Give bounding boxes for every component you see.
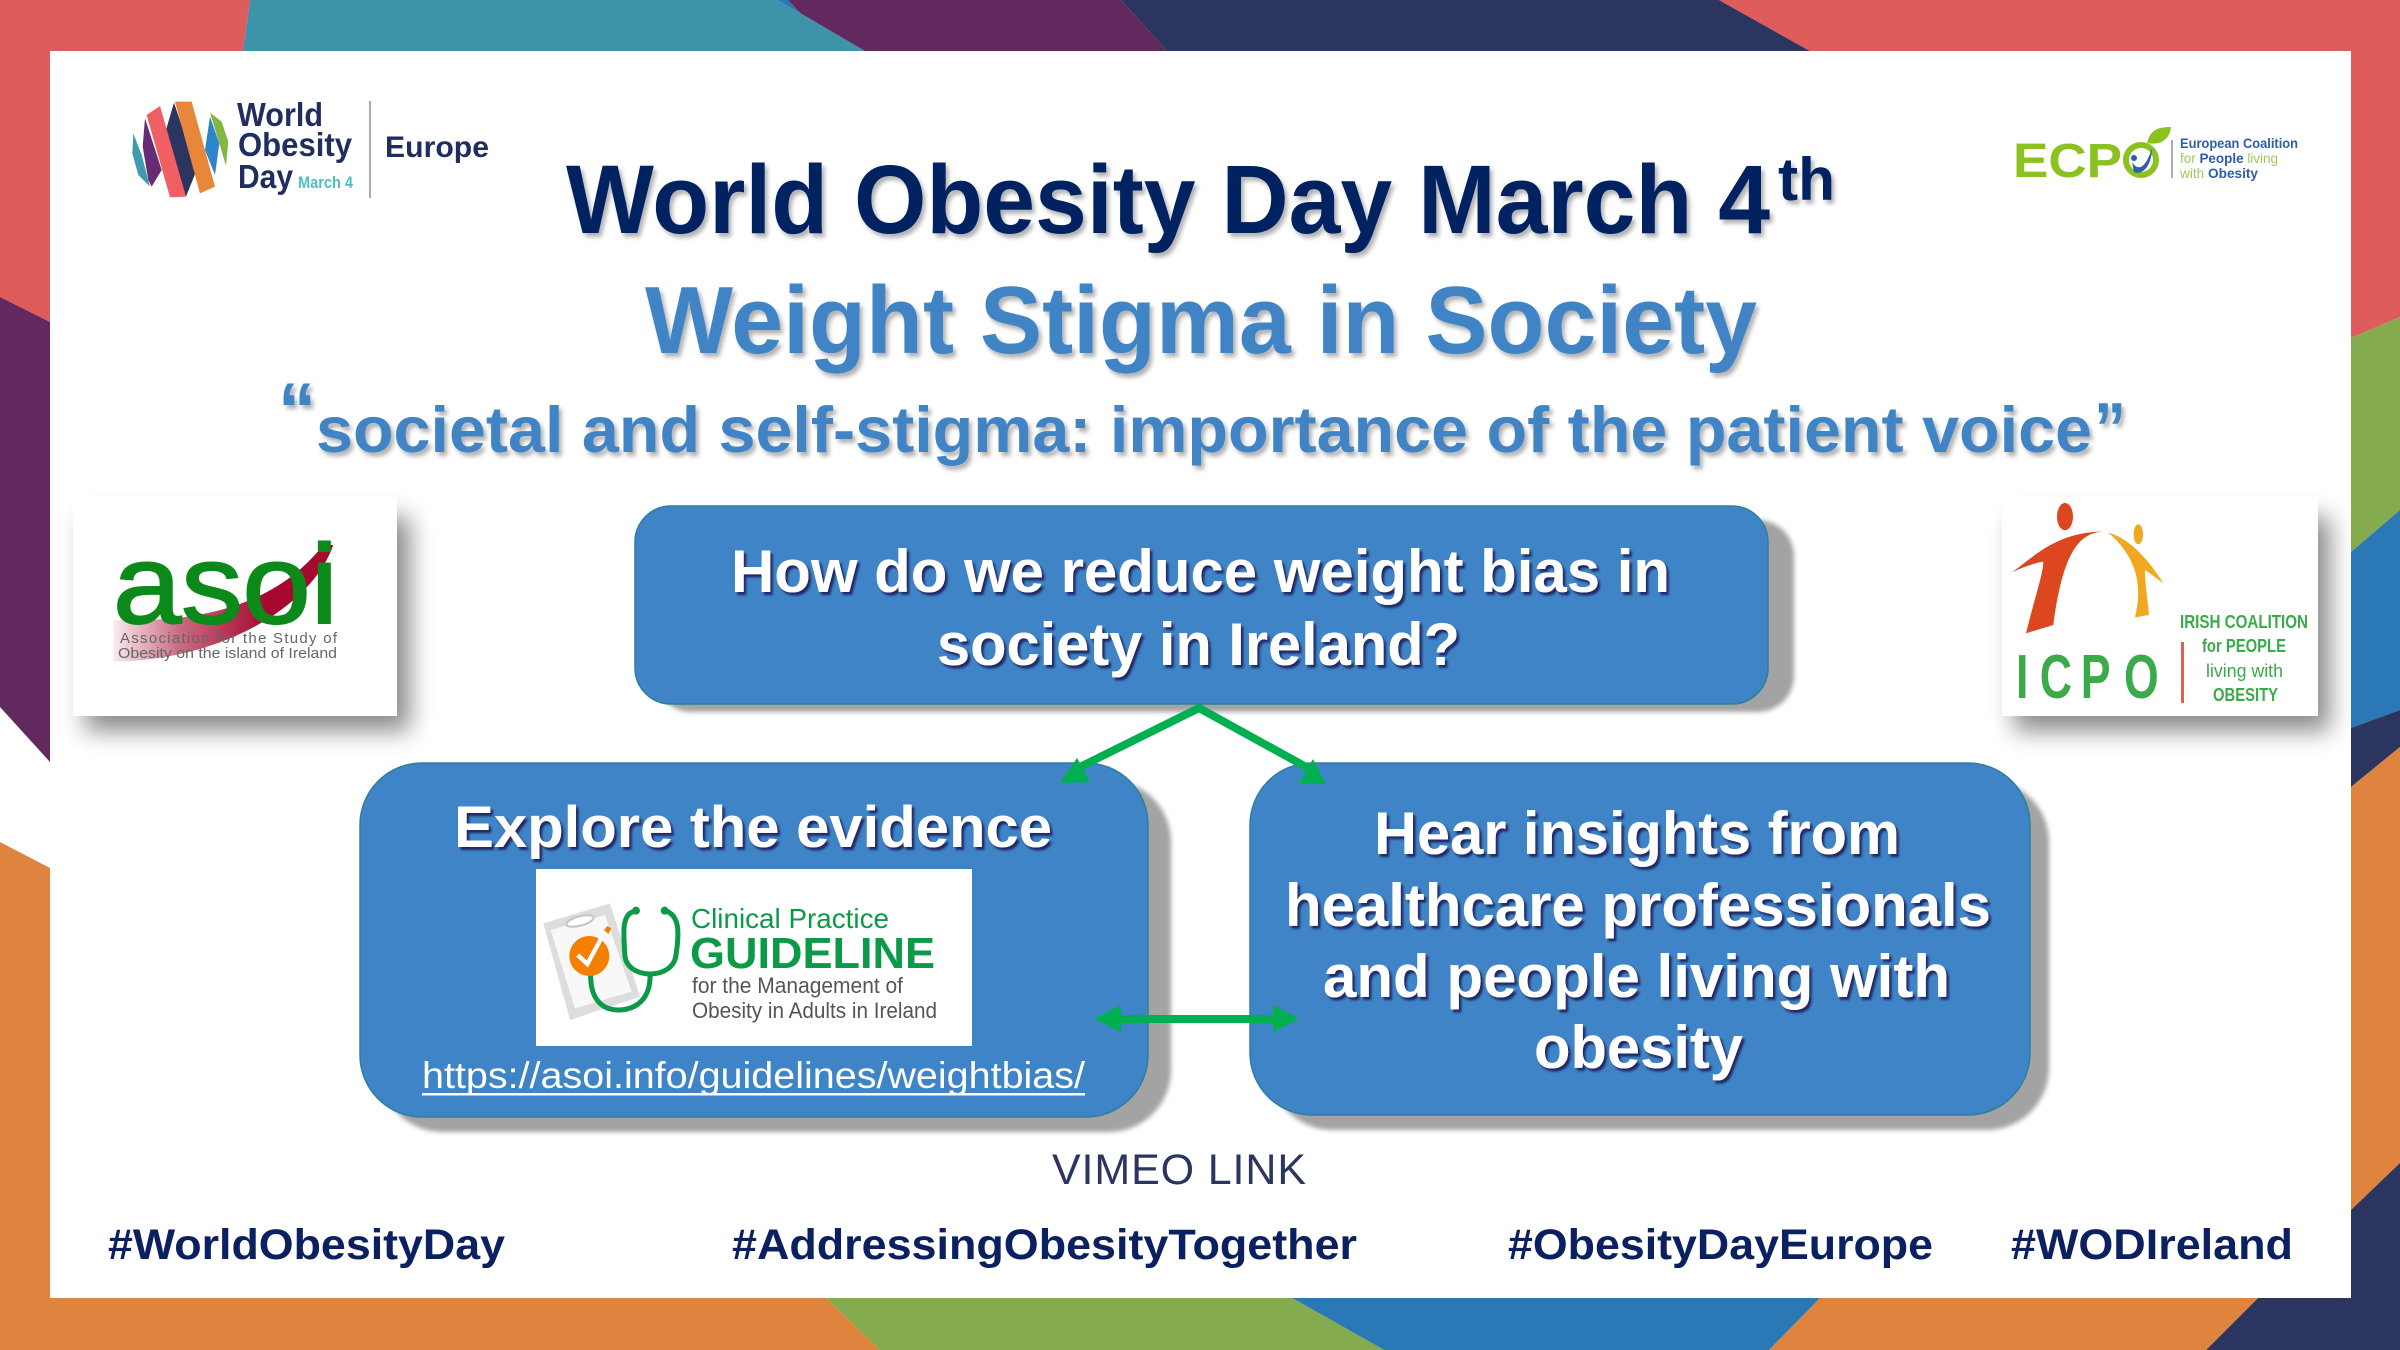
logo wordmark: Obesity <box>238 126 353 163</box>
guideline wordmark: Obesity in Adults in Ireland <box>692 998 937 1023</box>
logo wordmark: March 4 <box>298 173 353 192</box>
hashtags: #ObesityDayEurope <box>1508 1221 1933 1269</box>
ICPO descriptor: OBESITY <box>2213 685 2278 705</box>
panel: explore the evidence <box>360 763 1171 1132</box>
ECPO descriptor: for People living <box>2180 150 2278 166</box>
logo: ECPO <box>2013 127 2298 188</box>
hashtags: #WorldObesityDay <box>108 1221 505 1269</box>
guideline wordmark <box>690 903 937 1023</box>
icon: ECPO ring with leaf <box>2126 127 2171 175</box>
ASOI descriptor: Association for the Study of <box>120 630 338 647</box>
hashtags: #AddressingObesityTogether <box>732 1221 1357 1269</box>
ICPO descriptor: IRISH COALITION <box>2180 612 2308 632</box>
ICPO descriptor: for PEOPLE <box>2202 636 2286 656</box>
insights text: Hear insights from <box>1374 800 1900 867</box>
ECPO descriptor: with Obesity <box>2179 165 2258 181</box>
vimeo link text: VIMEO LINK <box>1052 1146 1306 1194</box>
subtitle: Weight Stigma in Society <box>645 267 1757 374</box>
ASOI descriptor <box>118 630 338 662</box>
arrow: double-headed between panels <box>1094 1005 1299 1032</box>
title: World Obesity Day March 4 <box>566 145 1770 254</box>
title: th <box>1778 146 1835 213</box>
guideline wordmark: for the Management of <box>692 973 904 998</box>
icon: clipboard and stethoscope <box>543 903 678 1020</box>
hashtags <box>108 1221 2293 1269</box>
logo: ECPO: ECP <box>2013 135 2122 188</box>
insights text <box>1285 800 1991 1081</box>
quote line: societal and self-stigma: importance of the patient voice <box>316 393 2092 466</box>
logo wordmark <box>237 96 489 195</box>
logo wordmark: Europe <box>385 131 489 164</box>
ASOI wordmark: asoi <box>113 522 338 647</box>
logo: World Obesity Day Europe <box>132 96 489 198</box>
heading: explore the evidence: Explore the evidence <box>454 795 1052 860</box>
panel: question box <box>635 506 1794 712</box>
arrows: question to both panels <box>1060 708 1326 784</box>
ECPO descriptor: European Coalition <box>2180 135 2298 151</box>
logo wordmark: World <box>237 96 323 133</box>
panel: hear insights <box>1250 763 2049 1130</box>
ICPO descriptor <box>2180 612 2308 705</box>
logo wordmark: Day <box>238 158 294 195</box>
icon: ASOI swoosh <box>113 545 333 662</box>
quote line: ” <box>2094 389 2126 469</box>
question text <box>731 538 1670 678</box>
image: clinical practice guideline badge <box>536 869 972 1046</box>
ECPO descriptor <box>2179 135 2298 181</box>
link: https://asoi.info/guidelines/weightbias/ <box>422 1055 1086 1096</box>
icon: two figures <box>2012 503 2163 633</box>
icon: ribbon circle <box>132 102 228 197</box>
logo card: ASOI <box>73 497 410 731</box>
hashtags: #WODIreland <box>2011 1221 2293 1269</box>
ASOI descriptor: Obesity on the island of Ireland <box>118 645 337 662</box>
question text: How do we reduce weight bias in <box>731 538 1670 605</box>
guideline wordmark: Clinical Practice <box>691 903 889 934</box>
ICPO wordmark: ICPO <box>2016 643 2159 712</box>
question text: society in Ireland? <box>937 611 1460 678</box>
ICPO descriptor: living with <box>2206 661 2283 681</box>
quote line <box>278 368 2126 469</box>
insights text: and people living with <box>1323 943 1950 1010</box>
quote line: “ <box>278 368 316 453</box>
logo card: ICPO <box>2002 497 2330 731</box>
insights text: healthcare professionals <box>1285 872 1991 939</box>
insights text: obesity <box>1534 1014 1744 1081</box>
guideline wordmark: GUIDELINE <box>690 929 935 978</box>
